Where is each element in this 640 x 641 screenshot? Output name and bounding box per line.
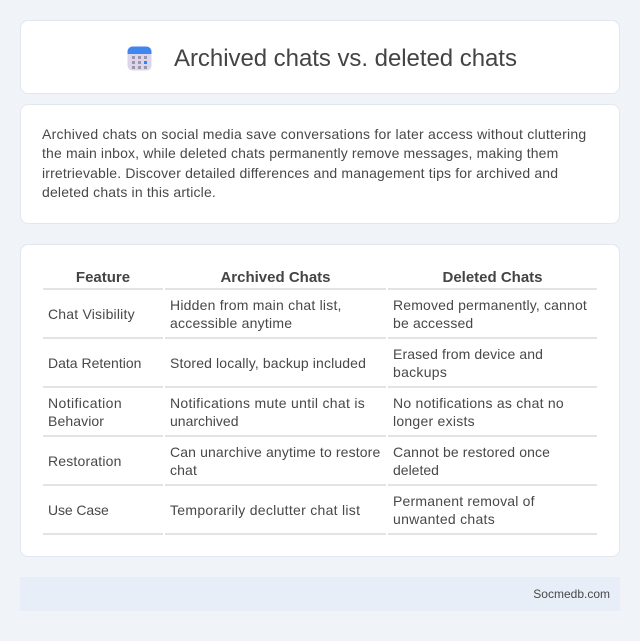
intro text xyxy=(42,126,586,200)
row: chat visibility: be accessed xyxy=(393,315,473,331)
intro text: Archived chats on social media save conversations for later access without cluttering xyxy=(42,126,586,142)
row: notification behavior: longer exists xyxy=(393,413,475,429)
row: restoration: chat xyxy=(170,462,197,478)
row: use case xyxy=(48,493,535,527)
row: restoration: Cannot be restored once xyxy=(393,444,550,460)
table headers xyxy=(76,269,543,286)
row: notification behavior: Behavior xyxy=(48,413,104,429)
row: use case: Temporarily declutter chat list xyxy=(170,502,360,518)
icon: calendar xyxy=(128,46,152,70)
panel: intro xyxy=(20,104,620,224)
intro text: the main inbox, while deleted chats permanently remove messages, making them xyxy=(42,145,558,161)
row: data retention: Data Retention xyxy=(48,355,141,371)
title: Archived chats vs. deleted chats xyxy=(174,45,517,72)
row: use case: unwanted chats xyxy=(393,511,495,527)
row: notification behavior: unarchived xyxy=(170,413,238,429)
row: restoration xyxy=(48,444,550,478)
row: chat visibility xyxy=(48,297,587,331)
row: notification behavior: Notification xyxy=(48,395,122,411)
row: use case: Permanent removal of xyxy=(393,493,535,509)
row: chat visibility: accessible anytime xyxy=(170,315,292,331)
row: restoration: deleted xyxy=(393,462,439,478)
row: notification behavior xyxy=(48,395,564,429)
row: restoration: Can unarchive anytime to restore xyxy=(170,444,380,460)
table headers: Feature xyxy=(76,269,130,286)
row: restoration: Restoration xyxy=(48,453,122,469)
row: chat visibility: Chat Visibility xyxy=(48,306,135,322)
footer xyxy=(20,577,620,611)
row: chat visibility: Removed permanently, cannot xyxy=(393,297,587,313)
row: data retention: Stored locally, backup included xyxy=(170,355,366,371)
header card xyxy=(20,20,620,94)
row: data retention xyxy=(48,346,543,380)
row: notification behavior: No notifications as chat no xyxy=(393,395,564,411)
row: chat visibility: Hidden from main chat list, xyxy=(170,297,342,313)
row: data retention: Erased from device and xyxy=(393,346,543,362)
row: data retention: backups xyxy=(393,364,447,380)
row: use case: Use Case xyxy=(48,502,109,518)
panel: comparison table xyxy=(20,244,620,557)
table headers: Deleted Chats xyxy=(442,269,543,286)
intro text: irretrievable. Discover detailed differences and management tips for archived and xyxy=(42,165,558,181)
footer source: Socmedb.com xyxy=(533,587,610,601)
intro text: deleted chats in this article. xyxy=(42,184,216,200)
table headers: Archived Chats xyxy=(220,269,331,286)
row: notification behavior: Notifications mute until chat is xyxy=(170,395,365,411)
